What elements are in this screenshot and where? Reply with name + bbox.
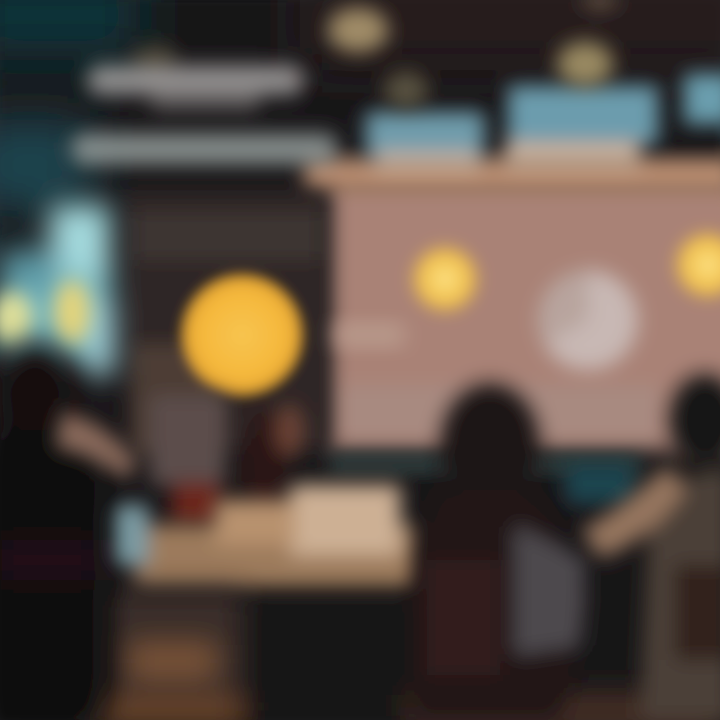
silhouette: left person: [0, 342, 105, 720]
ceiling lights: [133, 0, 618, 108]
figures at counter: [150, 395, 304, 524]
silhouette: right person: [582, 374, 720, 720]
small yellow wall light: [403, 237, 487, 321]
faint wall text: [335, 322, 405, 348]
left window lights: [0, 280, 90, 344]
pale pie circle: [538, 270, 638, 370]
teal object at right: [565, 464, 635, 504]
right yellow wall light: [666, 223, 720, 307]
back wall: [328, 185, 720, 450]
teal bar strip: [330, 452, 640, 474]
lower floor area: [90, 590, 720, 720]
dark central column: [125, 190, 330, 455]
bright left window: [0, 205, 115, 375]
peach band under signs: [305, 158, 720, 192]
blue sign panels: [366, 74, 720, 170]
ceiling colour wash: [0, 0, 720, 210]
counter table: [112, 485, 415, 587]
blurred headline text: [72, 66, 337, 164]
silhouette: middle person: [412, 383, 590, 720]
large orange circle: [182, 275, 302, 395]
left person arm: [55, 412, 138, 478]
